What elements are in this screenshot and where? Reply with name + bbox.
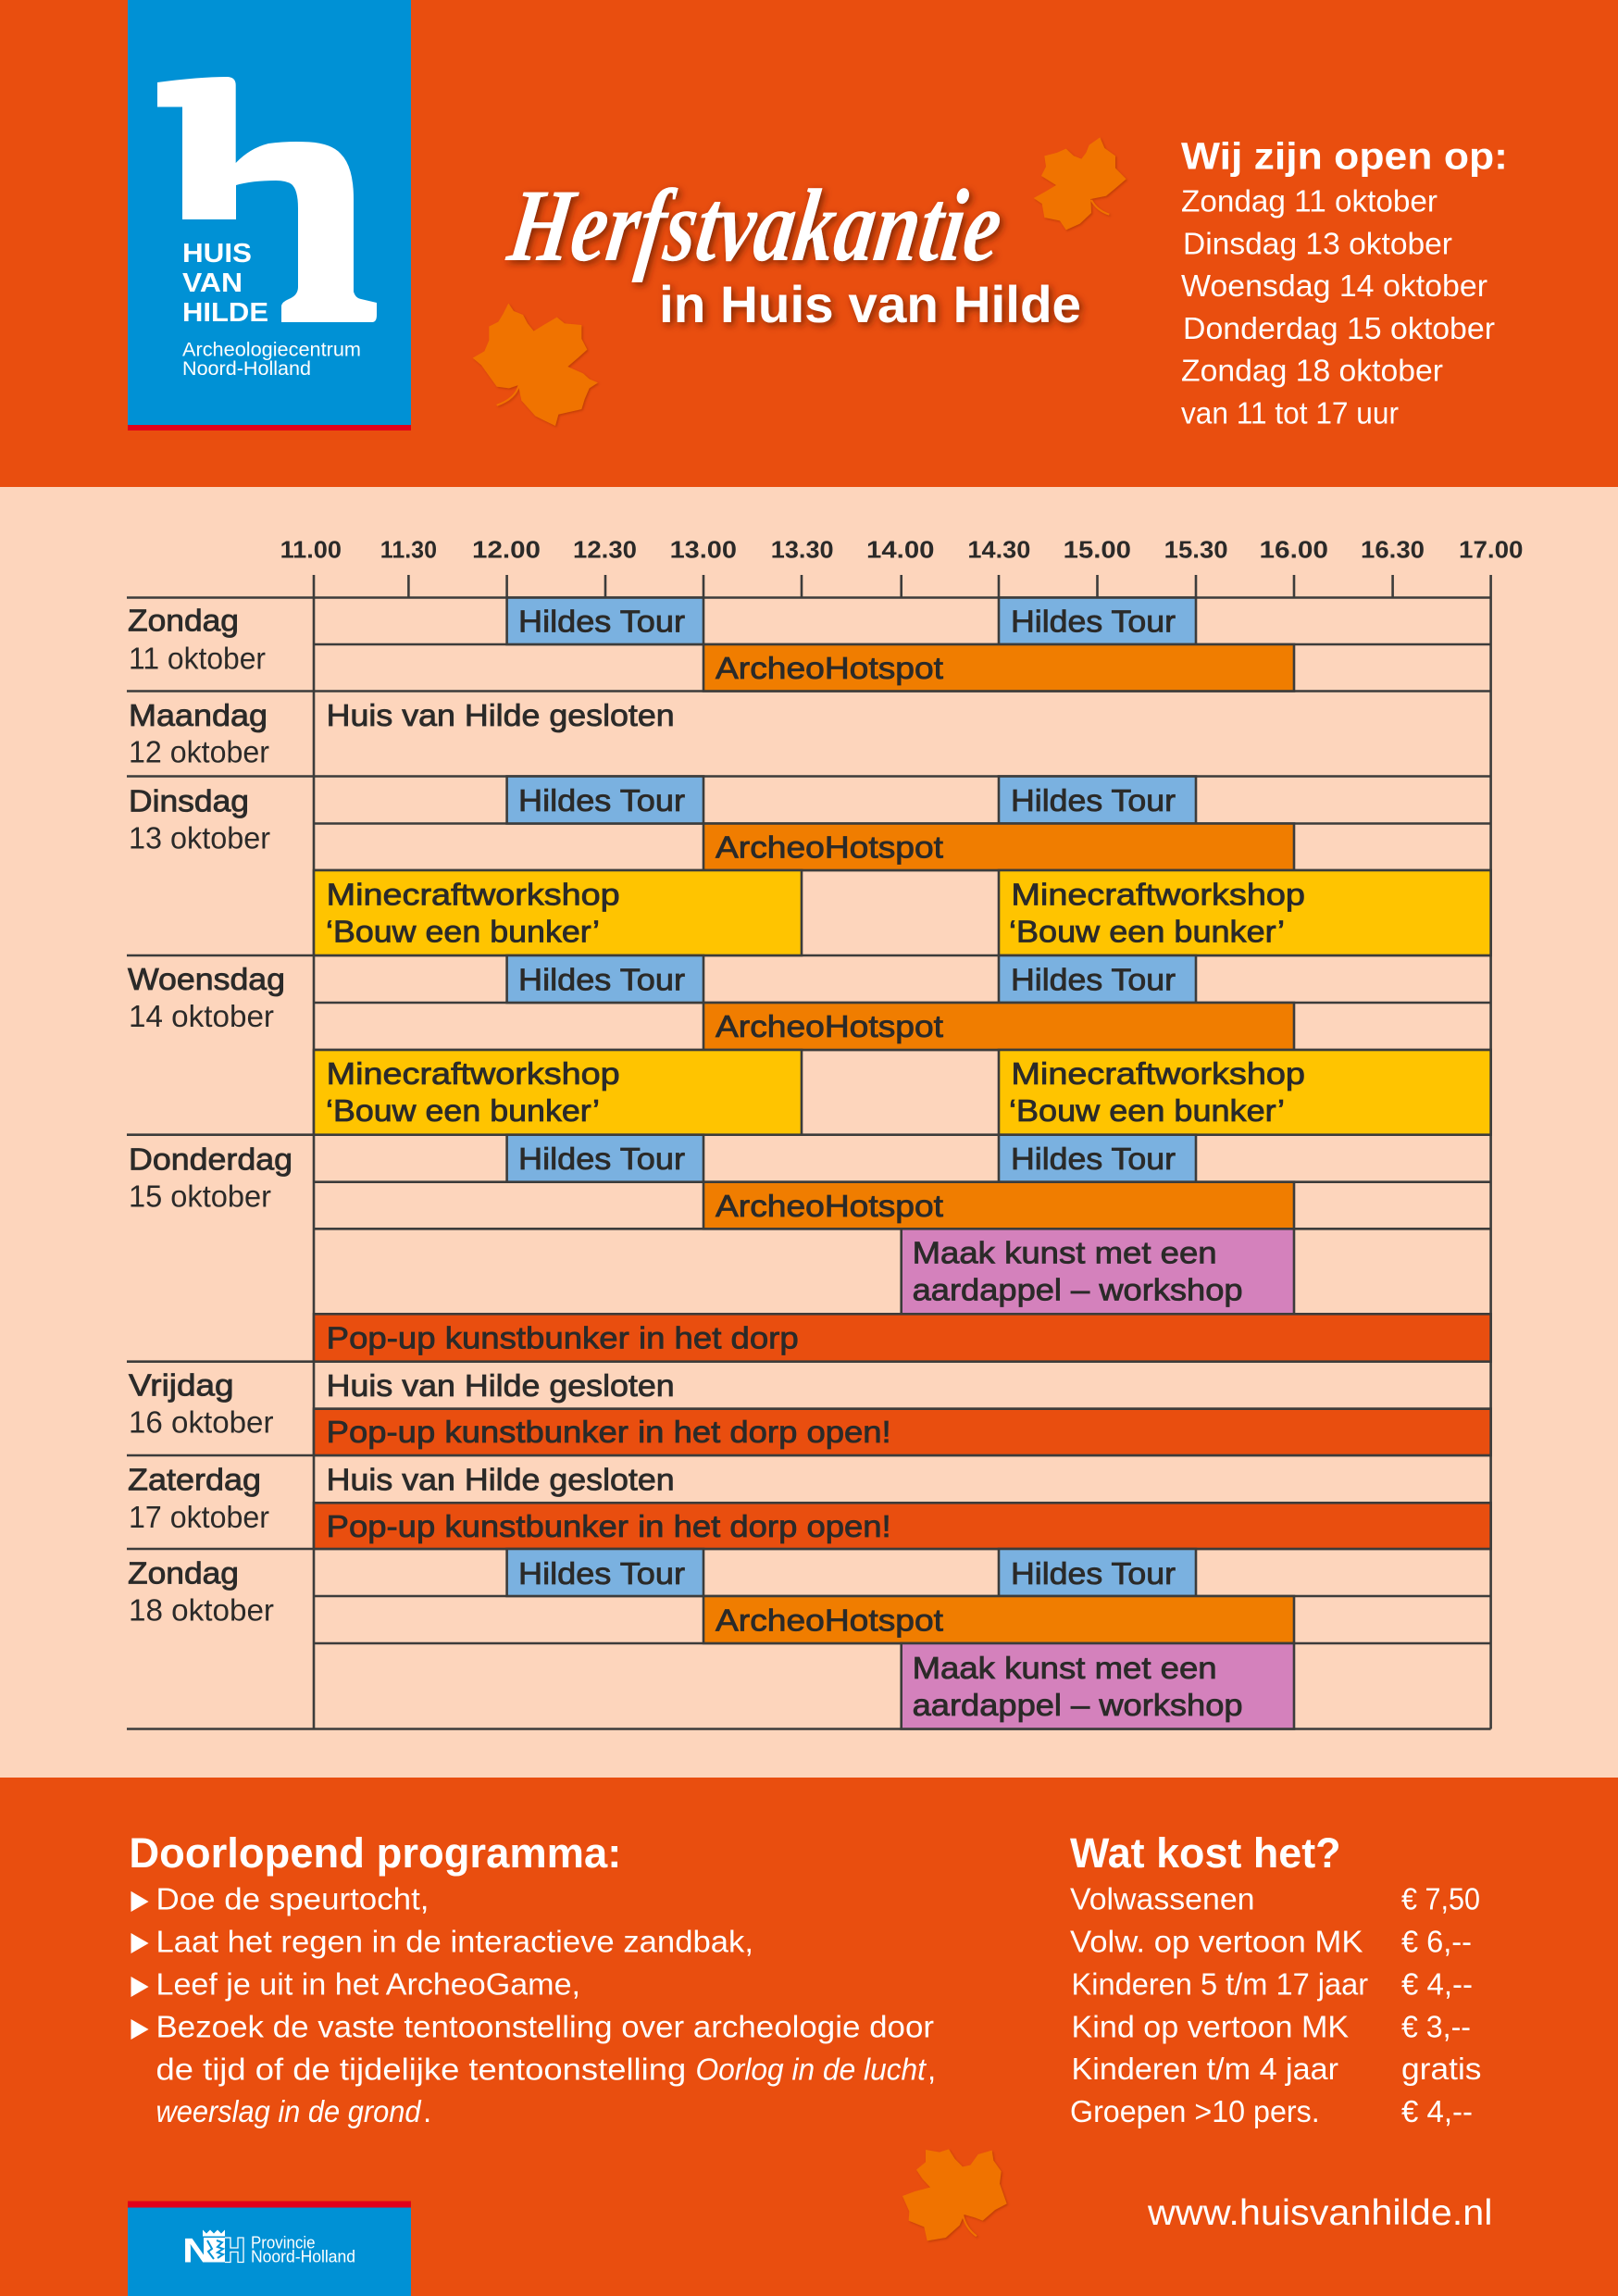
panel: Wat kost het bbox=[1070, 1829, 1481, 2128]
price values: € 3,-- bbox=[1401, 2009, 1471, 2043]
price labels: Groepen >10 pers. bbox=[1070, 2094, 1320, 2128]
bar: Hildes Tour afternoon bbox=[999, 1549, 1196, 1596]
price values: € 4,-- bbox=[1401, 1966, 1473, 2001]
day label: Zaterdag bbox=[128, 1462, 261, 1496]
day: Zondag 18 oktober bbox=[128, 1549, 1294, 1729]
price labels: Kinderen 5 t/m 17 jaar bbox=[1072, 1966, 1368, 2001]
bar: Pop-up kunstbunker open bbox=[314, 1409, 1491, 1455]
text block: opening days: Woensdag 14 oktober bbox=[1181, 268, 1487, 303]
bar: Hildes Tour morning: Hildes Tour bbox=[518, 1142, 685, 1176]
bar: ArcheoHotspot bbox=[703, 644, 1294, 691]
list item: speurtocht: Doe de speurtocht, bbox=[156, 1882, 429, 1916]
bar: Minecraftworkshop morning bbox=[314, 1050, 802, 1135]
day label: Woensdag bbox=[128, 962, 285, 996]
logo panel: Provincie Noord-Holland bbox=[128, 2202, 411, 2296]
bar: Minecraftworkshop afternoon: ‘Bouw een bunker’ bbox=[1009, 1093, 1285, 1128]
bar: Hildes Tour afternoon: Hildes Tour bbox=[1011, 1142, 1176, 1176]
closed notice: Huis van Hilde gesloten bbox=[327, 1368, 675, 1403]
time axis labels: 16.00 bbox=[1259, 536, 1328, 564]
price values: € 7,50 bbox=[1401, 1882, 1480, 1916]
bar: Minecraftworkshop morning: Minecraftworkshop bbox=[327, 877, 620, 911]
closed notice: Huis van Hilde gesloten bbox=[327, 1463, 675, 1496]
heading: Doorlopend programma: bbox=[129, 1829, 621, 1877]
day label: Zondag bbox=[128, 1555, 239, 1591]
logo panel: Huis van Hilde: HUIS bbox=[182, 239, 252, 268]
bar: Hildes Tour afternoon: Hildes Tour bbox=[1011, 783, 1176, 817]
day: Zondag 11 oktober bbox=[128, 598, 1294, 691]
bar: Hildes Tour morning bbox=[507, 1549, 703, 1596]
price labels: Volw. op vertoon MK bbox=[1070, 1924, 1363, 1958]
title: Herfstvakantie in Huis van Hilde: Herfstvakantie bbox=[502, 168, 1009, 283]
logo panel: Provincie Noord-Holland: Noord-Holland bbox=[251, 2248, 355, 2266]
bar: ArcheoHotspot: ArcheoHotspot bbox=[716, 1189, 943, 1223]
logo panel: Huis van Hilde: HILDE bbox=[182, 298, 268, 328]
heading: Wat kost het? bbox=[1070, 1829, 1341, 1877]
price labels bbox=[1070, 1882, 1368, 2128]
price values: € 4,-- bbox=[1401, 2094, 1473, 2128]
day label bbox=[128, 604, 266, 676]
bar: Pop-up kunstbunker open bbox=[314, 1503, 1491, 1549]
bar: Minecraftworkshop afternoon bbox=[999, 870, 1491, 955]
day: Dinsdag 13 oktober bbox=[129, 776, 1491, 955]
price labels: Volwassenen bbox=[1070, 1882, 1255, 1916]
bar: ArcheoHotspot bbox=[703, 824, 1294, 870]
bar: Maak kunst workshop: aardappel – workshop bbox=[913, 1688, 1243, 1722]
day: Zaterdag 17 oktober bbox=[128, 1462, 1491, 1549]
bar: Minecraftworkshop morning bbox=[314, 870, 802, 955]
bar: Pop-up kunstbunker open: Pop-up kunstbunker in het dorp open! bbox=[327, 1509, 891, 1543]
time axis labels: 13.00 bbox=[670, 536, 737, 564]
day label bbox=[129, 1367, 274, 1439]
bar: Minecraftworkshop afternoon bbox=[999, 1050, 1491, 1135]
bar: Maak kunst workshop: Maak kunst met een bbox=[913, 1651, 1217, 1685]
price values bbox=[1401, 1882, 1481, 2128]
list item: zandbak: Laat het regen in de interactieve zandbak, bbox=[156, 1924, 753, 1958]
bar: ArcheoHotspot bbox=[703, 1182, 1294, 1229]
day label: 11 oktober bbox=[129, 642, 266, 676]
day label bbox=[129, 784, 270, 855]
day label: Vrijdag bbox=[129, 1367, 234, 1402]
bar: Hildes Tour morning bbox=[507, 955, 703, 1003]
bar: ArcheoHotspot bbox=[703, 1596, 1294, 1643]
day label: Donderdag bbox=[129, 1142, 292, 1176]
day label: 17 oktober bbox=[129, 1500, 269, 1534]
day label bbox=[128, 962, 285, 1033]
bar: Minecraftworkshop morning: ‘Bouw een bunker’ bbox=[326, 914, 600, 948]
day label: 16 oktober bbox=[129, 1404, 274, 1439]
day label: Dinsdag bbox=[129, 784, 249, 818]
bar: Hildes Tour afternoon: Hildes Tour bbox=[1011, 605, 1176, 639]
bar: Pop-up kunstbunker bbox=[314, 1314, 1491, 1362]
bar: Hildes Tour afternoon bbox=[999, 598, 1196, 644]
day label: 15 oktober bbox=[129, 1179, 271, 1213]
day label: 18 oktober bbox=[129, 1592, 274, 1628]
logo panel: Huis van Hilde: Archeologiecentrum bbox=[182, 339, 361, 361]
text block: opening days: Dinsdag 13 oktober bbox=[1183, 226, 1452, 260]
bar: Minecraftworkshop afternoon: Minecraftworkshop bbox=[1011, 1056, 1305, 1091]
icon: maple leaf left of title bbox=[473, 304, 598, 426]
text block: opening days: Donderdag 15 oktober bbox=[1183, 311, 1495, 345]
bar: Minecraftworkshop morning: Minecraftworkshop bbox=[327, 1056, 620, 1091]
logo panel: Provincie Noord-Holland: N bbox=[182, 2231, 213, 2270]
bar: Hildes Tour morning bbox=[507, 776, 703, 824]
time axis labels: 12.30 bbox=[573, 536, 637, 564]
list item: ArcheoGame: Leef je uit in het ArcheoGame, bbox=[156, 1966, 580, 2001]
day label: Zondag bbox=[128, 604, 239, 638]
bar: Hildes Tour morning: Hildes Tour bbox=[518, 963, 685, 996]
panel: Doorlopend programma bbox=[129, 1829, 936, 2128]
time axis labels: 15.30 bbox=[1164, 536, 1228, 564]
time axis labels: 12.00 bbox=[472, 536, 541, 564]
list item: tentoonstelling bbox=[131, 2009, 936, 2128]
text block: opening days bbox=[1181, 135, 1508, 430]
day label bbox=[128, 1555, 274, 1628]
logo panel: Provincie Noord-Holland: Provincie bbox=[251, 2233, 315, 2252]
time axis labels: 11.00 bbox=[280, 536, 342, 564]
text block: opening days: Wij zijn open op: bbox=[1181, 135, 1508, 178]
title: Herfstvakantie in Huis van Hilde bbox=[502, 168, 1081, 333]
day: Donderdag 15 oktober bbox=[129, 1135, 1491, 1362]
day: Maandag 12 oktober bbox=[129, 698, 675, 768]
bar: Hildes Tour afternoon: Hildes Tour bbox=[1011, 963, 1176, 996]
list item: tentoonstelling: . bbox=[423, 2094, 431, 2128]
day label: 14 oktober bbox=[129, 999, 274, 1033]
bar: Hildes Tour afternoon: Hildes Tour bbox=[1011, 1556, 1176, 1591]
bar: Hildes Tour morning: Hildes Tour bbox=[518, 783, 685, 817]
day label: 13 oktober bbox=[129, 821, 270, 855]
bar: Maak kunst workshop bbox=[902, 1643, 1294, 1729]
day label: 12 oktober bbox=[129, 734, 269, 768]
day label bbox=[129, 698, 269, 768]
bar: Maak kunst workshop: Maak kunst met een bbox=[913, 1236, 1217, 1270]
day: Woensdag 14 oktober bbox=[128, 955, 1491, 1135]
text block: opening days: Zondag 11 oktober bbox=[1181, 183, 1438, 218]
day label: Maandag bbox=[129, 698, 268, 732]
list item: tentoonstelling: de tijd of de tijdelijke tentoonstelling bbox=[156, 2052, 686, 2086]
bar: Minecraftworkshop afternoon: ‘Bouw een bunker’ bbox=[1009, 914, 1285, 948]
bar: ArcheoHotspot: ArcheoHotspot bbox=[716, 1603, 943, 1637]
list item: tentoonstelling: Bezoek de vaste tentoonstelling over archeologie door bbox=[156, 2009, 934, 2043]
bar: Minecraftworkshop afternoon: Minecraftworkshop bbox=[1011, 877, 1305, 911]
bar: Hildes Tour morning bbox=[507, 1135, 703, 1182]
bar: ArcheoHotspot: ArcheoHotspot bbox=[716, 830, 943, 865]
list item: tentoonstelling: Oorlog in de lucht bbox=[696, 2052, 927, 2086]
text block: opening days: Zondag 18 oktober bbox=[1181, 354, 1443, 388]
icon: maple leaf right of title bbox=[1034, 137, 1126, 230]
bar: Hildes Tour afternoon bbox=[999, 1135, 1196, 1182]
bar: Hildes Tour morning: Hildes Tour bbox=[518, 605, 685, 639]
time axis labels: 13.30 bbox=[771, 536, 834, 564]
bar: Hildes Tour afternoon bbox=[999, 776, 1196, 824]
text block: opening days: van 11 tot 17 uur bbox=[1181, 396, 1399, 430]
bar: ArcheoHotspot: ArcheoHotspot bbox=[716, 651, 943, 685]
bar: ArcheoHotspot: ArcheoHotspot bbox=[716, 1009, 943, 1043]
price labels: Kinderen t/m 4 jaar bbox=[1072, 2052, 1338, 2086]
icon: maple leaf bottom bbox=[902, 2149, 1007, 2240]
logo panel: Huis van Hilde: Noord-Holland bbox=[182, 358, 311, 380]
bar: Hildes Tour morning bbox=[507, 598, 703, 644]
schedule background panel bbox=[0, 487, 1618, 1778]
bar: Maak kunst workshop bbox=[902, 1229, 1294, 1314]
bar: Minecraftworkshop morning: ‘Bouw een bunker’ bbox=[326, 1093, 600, 1128]
closed notice: Huis van Hilde gesloten bbox=[327, 698, 675, 732]
website url: www.huisvanhilde.nl bbox=[1147, 2193, 1492, 2233]
time axis labels: 17.00 bbox=[1459, 536, 1524, 564]
title: Herfstvakantie in Huis van Hilde: in Huis van Hilde bbox=[659, 275, 1081, 333]
bar: Pop-up kunstbunker open: Pop-up kunstbunker in het dorp open! bbox=[327, 1415, 891, 1449]
price values: € 6,-- bbox=[1401, 1924, 1472, 1958]
day: Vrijdag 16 oktober bbox=[129, 1367, 1491, 1455]
time axis labels bbox=[280, 536, 1524, 564]
time axis labels: 14.30 bbox=[967, 536, 1030, 564]
schedule chart bbox=[127, 536, 1524, 1729]
bar: Hildes Tour afternoon bbox=[999, 955, 1196, 1003]
time axis labels: 14.00 bbox=[866, 536, 935, 564]
time axis labels: 15.00 bbox=[1064, 536, 1131, 564]
time axis labels: 16.30 bbox=[1361, 536, 1425, 564]
day label bbox=[129, 1142, 292, 1213]
bar: ArcheoHotspot bbox=[703, 1003, 1294, 1050]
price labels: Kind op vertoon MK bbox=[1072, 2009, 1349, 2043]
logo panel: Huis van Hilde bbox=[128, 0, 411, 430]
time axis labels: 11.30 bbox=[380, 536, 437, 564]
list item: tentoonstelling: weerslag in de grond bbox=[156, 2094, 422, 2128]
logo panel: Huis van Hilde: VAN bbox=[182, 268, 243, 298]
bar: Maak kunst workshop: aardappel – workshop bbox=[913, 1273, 1243, 1307]
list item: tentoonstelling: , bbox=[927, 2052, 936, 2086]
bar: Hildes Tour morning: Hildes Tour bbox=[518, 1556, 685, 1591]
day label bbox=[128, 1462, 269, 1534]
bar: Pop-up kunstbunker: Pop-up kunstbunker in het dorp bbox=[327, 1321, 799, 1355]
price values: gratis bbox=[1401, 2052, 1481, 2086]
